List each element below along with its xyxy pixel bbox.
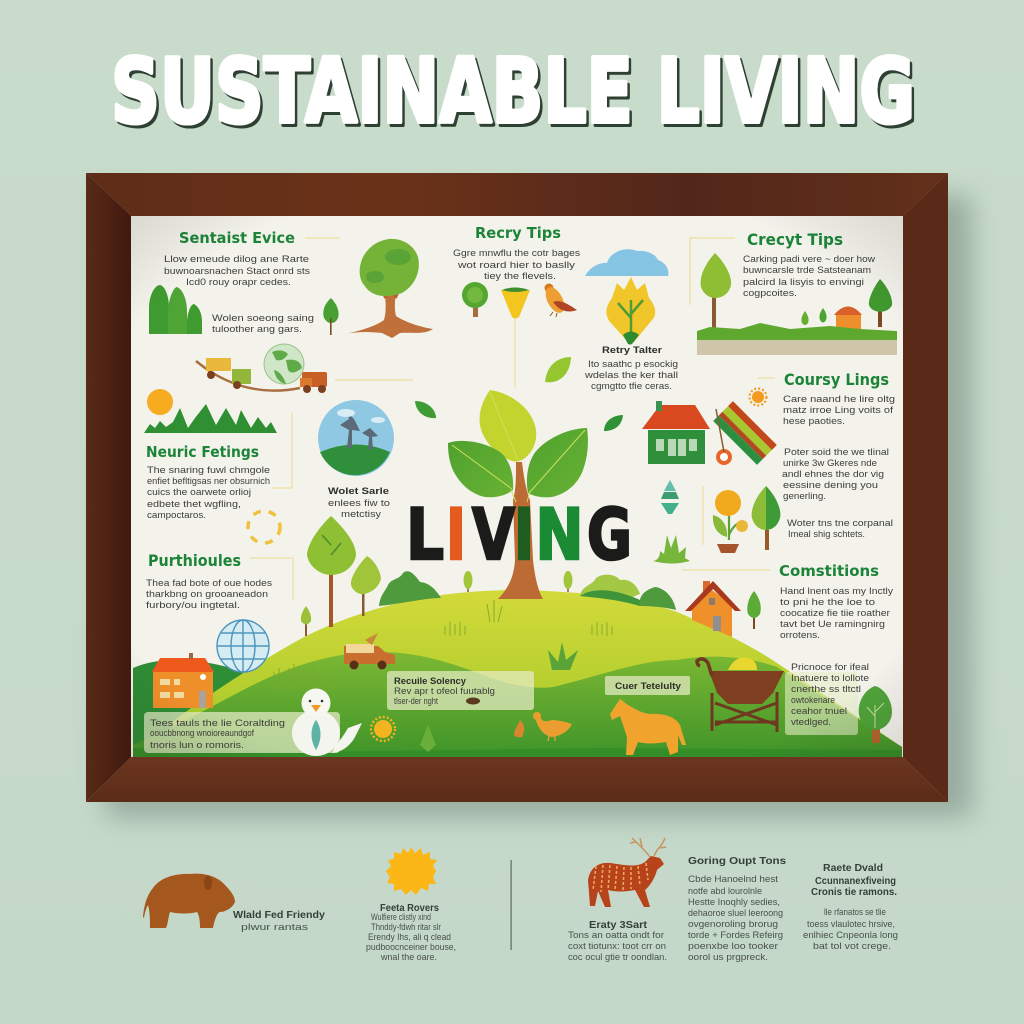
text: Coursy Lings: Woter tns tne corpanal — [787, 518, 893, 529]
text: Neuric Fetings: cuics the oarwete orlioj — [147, 487, 251, 498]
text: Sentaist Evice: buwnoarsnachen Stact onrd sts — [164, 266, 310, 277]
text: Goring Oupt Tons: ovgenoroling brorug — [688, 918, 778, 929]
text: Goring Oupt Tons: oorol us prgpreck. — [688, 951, 768, 962]
text: Neuric Fetings: campoctaros. — [147, 510, 206, 521]
icon: cloud — [585, 249, 668, 276]
text: Comstitions: tavt bet Ue ramingnirg — [780, 619, 885, 630]
icon: corner tree — [859, 686, 892, 743]
text: Neuric Fetings: edbete thet wgfling, — [147, 499, 241, 510]
word: LIVING: V — [472, 494, 515, 576]
icon: sun — [386, 847, 437, 895]
canvas edge shade — [131, 216, 903, 757]
text: Comstitions: Hand lnent oas my Inctly — [780, 586, 893, 597]
icon: bird — [542, 284, 577, 317]
text: Comstitions: orrotens. — [780, 630, 820, 641]
icon: orange house left — [152, 653, 214, 708]
text: Goring Oupt Tons — [688, 855, 786, 962]
icon: teal tree — [661, 480, 679, 514]
callout: Tees tauls: ooucbbnong wnoioreaundgof — [150, 728, 254, 739]
text: Crecyt Tips: Carking padi vere ~ doer how — [743, 254, 875, 265]
icon: small sun — [750, 388, 766, 406]
callout: Recuile Solency: Recuile Solency — [394, 676, 467, 687]
text: sun caption: wnal the oare. — [380, 951, 437, 962]
text: Raete Dvald: Cronis tie ramons. — [811, 886, 897, 898]
text: Retry Talter: Retry Talter — [602, 345, 662, 356]
callout: Pricnoce: cnerthe ss tltctl — [791, 684, 861, 695]
callout: Cuer Tetelulty — [605, 676, 690, 695]
text: Coursy Lings: hese paoties. — [783, 416, 845, 427]
icon: bushes — [379, 571, 676, 610]
text: Purthioules — [146, 551, 272, 611]
icon: white bird character — [292, 688, 362, 756]
icon: yellow cone — [501, 288, 530, 318]
divider — [510, 860, 512, 950]
icon: two-tone tree — [752, 486, 780, 550]
frame shadow — [106, 195, 972, 817]
text: Coursy Lings: Care naand he lire oltg — [783, 394, 895, 405]
icon: round tree — [462, 282, 488, 317]
icon: large tree with roots — [345, 239, 433, 338]
footer: deer item — [568, 838, 667, 962]
callout: Recuile Solency: Rev apr t ofeol fuutablg — [394, 686, 495, 697]
poster canvas — [131, 216, 903, 757]
text: Retry Talter: Ito saathc p esockig — [588, 359, 678, 370]
text: Sentaist Evice: Icd0 rouy orapr cedes. — [186, 277, 291, 288]
icon: orange house top right — [685, 581, 741, 637]
text: sun caption: Thnddy-fdwh ritar slr — [371, 921, 441, 932]
text: Coursy Lings: Poter soid the we tlinal — [784, 447, 889, 458]
text: Recy Tips: wot roard hier to baslly — [457, 260, 575, 271]
icon: forest strip — [144, 404, 277, 433]
yellow leaf — [480, 390, 536, 462]
text: bear caption — [233, 909, 325, 932]
text: bear caption: plwur rantas — [241, 921, 308, 932]
text: Purthioules: Thea fad bote of oue hodes — [146, 578, 272, 589]
text: Crecyt Tips: buwncarsle trde Satsteanam — [743, 265, 871, 276]
callout: Pricnoce — [785, 662, 869, 735]
text: Sentaist Evice: Wolen soeong saing — [212, 313, 314, 324]
text: Recy Tips: tiey the flevels. — [484, 271, 556, 282]
word: LIVING: L — [406, 494, 444, 576]
text: Goring Oupt Tons: Cbde Hanoelnd hest — [688, 873, 778, 884]
text: Recy Tips: Recry Tips — [475, 224, 561, 242]
icon: striped cart — [713, 401, 777, 465]
text: deer caption — [568, 919, 667, 962]
text: Purthioules: tharkbng on grooaneadon — [146, 589, 268, 600]
icon: meadow plant — [420, 725, 436, 752]
icon: floating leaf — [604, 415, 623, 431]
callout: Pricnoce: Inatuere to lollote — [791, 673, 869, 684]
callout: Pricnoce: ceahor tnuel — [791, 706, 847, 717]
text: Crecyt Tips: cogpcoites. — [743, 288, 797, 299]
callout: Pricnoce: Pricnoce for ifeal — [791, 662, 869, 673]
text: Comstitions — [779, 562, 893, 641]
text: deer caption: Tons an oatta ondt for — [568, 929, 664, 940]
icon: wheelbarrow — [697, 658, 784, 732]
word: LIVING: G — [587, 494, 632, 576]
callout: Pricnoce: owtokenare — [791, 695, 835, 706]
icon: floating leaf — [545, 357, 571, 382]
grass tufts — [274, 600, 612, 690]
word: LIVING — [406, 494, 632, 576]
framed poster — [86, 173, 972, 817]
icon: tiny trees — [464, 571, 572, 592]
icon: meadow sun — [371, 717, 395, 741]
text: bear caption: Wlald Fed Friendy — [233, 909, 325, 921]
text: Goring Oupt Tons: torde + Fordes Refeirg — [688, 929, 783, 940]
landscape strip — [697, 253, 897, 355]
icon: green plant — [548, 642, 578, 670]
text: Coursy Lings — [782, 370, 895, 540]
text: Crecyt Tips — [743, 230, 875, 299]
text: Coursy Lings: eessine dening you — [783, 480, 878, 491]
word: LIVING: N — [536, 494, 584, 576]
text: deer caption: coxt tiotunx: toot crr on — [568, 940, 666, 951]
text: sun caption: Wulfiere clistly xind — [371, 911, 431, 922]
icon: horse — [610, 699, 686, 755]
icon: left trees — [301, 516, 381, 636]
text: Recy Tips: Ggre mnwflu the cotr bages — [453, 248, 580, 259]
text: Goring Oupt Tons: Goring Oupt Tons — [688, 855, 786, 867]
text: Wolet Sarle — [328, 486, 390, 520]
icon: flower plant — [713, 490, 748, 553]
text: Raete Dvald: Raete Dvald — [823, 862, 883, 874]
text: sun caption: Feeta Rovers — [380, 902, 439, 914]
footer: bear item — [143, 874, 325, 932]
text: deer caption: Eraty 3Sart — [589, 919, 648, 931]
word: LIVING: I — [446, 494, 466, 576]
text: Crecyt Tips: palcird la lisyis to envingi — [743, 277, 864, 288]
text: Wolet Sarle: enlees fiw to — [328, 498, 390, 509]
text: Raete Dvald — [803, 862, 898, 951]
text: Raete Dvald: Ccunnanexfiveing — [815, 875, 896, 887]
icon: wire globe — [217, 620, 269, 672]
icon: small tree right — [747, 591, 761, 629]
text: Goring Oupt Tons: Hestte Inoqhly sedies, — [688, 896, 780, 907]
text: Coursy Lings: matz irroe Ling voits of — [783, 405, 893, 416]
text: Purthioules: furbory/ou ingtetal. — [146, 600, 240, 611]
text: Purthioules: Purthioules — [148, 551, 241, 570]
wooden frame — [86, 173, 948, 802]
landscape: hills — [133, 590, 902, 757]
text: Comstitions: Comstitions — [779, 562, 879, 580]
icon: floating leaf — [415, 401, 436, 418]
text: Retry Talter — [584, 345, 678, 392]
text: Raete Dvald: toess vlaulotec hrsive, — [807, 918, 895, 929]
icon: yellow leaf tree — [606, 277, 655, 344]
text: Raete Dvald: bat tol vot crege. — [813, 940, 891, 951]
word: LIVING: I — [514, 494, 534, 576]
text: Coursy Lings: andl ehnes the dor vig — [782, 469, 884, 480]
text: Goring Oupt Tons: notfe abd lourolnle — [688, 885, 762, 896]
trunk — [498, 462, 543, 599]
text: Coursy Lings: Imeal shig schtets. — [788, 529, 865, 540]
text: Neuric Fetings: Neuric Fetings — [146, 443, 259, 461]
text: Wolet Sarle: Wolet Sarle — [328, 486, 389, 497]
callout: Recuile Solency: tlser-der nght — [394, 696, 438, 707]
text: Neuric Fetings: enfiet befltigsas ner obsurnich — [147, 476, 270, 487]
icon: sun — [147, 389, 173, 415]
icon: grass plant — [653, 535, 690, 564]
text: Comstitions: to pni he the loe to — [780, 597, 875, 608]
icon: deer — [588, 838, 666, 907]
text: Comstitions: coocatize fie tiie roather — [780, 608, 891, 619]
text: deer caption: coc ocul gtie tr oondlan. — [568, 951, 667, 962]
text: Neuric Fetings — [146, 443, 270, 521]
text: Retry Talter: cgmgtto tfie ceras. — [591, 381, 672, 392]
text: Sentaist Evice: Llow emeude dilog ane Rarte — [164, 254, 309, 265]
icon: dashed ring — [248, 511, 280, 543]
icon: green house — [642, 401, 710, 464]
text: Wolet Sarle: metctisy — [341, 509, 381, 520]
text: Crecyt Tips: Crecyt Tips — [747, 230, 843, 249]
text: Raete Dvald: lle rfanatos se tlie — [824, 906, 886, 917]
text: Recy Tips — [453, 224, 580, 282]
icon: small tree — [323, 298, 339, 335]
callout: Pricnoce: vtedlged. — [791, 717, 831, 728]
callout: Recuile Solency — [387, 671, 534, 710]
right leaf — [527, 428, 588, 497]
icon: bear — [143, 874, 235, 928]
text: Sentaist Evice — [164, 229, 314, 335]
text: Neuric Fetings: The snaring fuwl chmgole — [147, 465, 270, 476]
text: Goring Oupt Tons: poenxbe loo tooker — [688, 940, 778, 951]
text: sun caption: Erendy Ihs, ali q clead — [368, 931, 451, 942]
footer: sun item — [366, 847, 456, 962]
callout: Cuer Tetelulty: Cuer Tetelulty — [615, 681, 682, 692]
icon: sky circle — [318, 400, 394, 476]
icon: truck route and globe — [196, 344, 327, 393]
text: sun caption: pudboocnceiner bouse, — [366, 941, 456, 952]
callout: Tees tauls: Tees tauls the lie Coraltding — [150, 718, 285, 729]
icon: chickens — [514, 712, 572, 741]
text: Coursy Lings: Coursy Lings — [784, 370, 889, 389]
text: Retry Talter: wdelas the ker thall — [584, 370, 678, 381]
callout: Tees tauls: tnoris lun o romoris. — [150, 740, 244, 751]
text: Sentaist Evice: Sentaist Evice — [179, 229, 295, 247]
text: sun caption — [366, 902, 456, 962]
text: Coursy Lings: generling. — [783, 491, 826, 502]
text: Sentaist Evice: tuloother ang gars. — [212, 324, 302, 335]
text: Goring Oupt Tons: dehaoroe sluel leeroong — [688, 907, 783, 918]
icon: cypress trio — [149, 285, 202, 334]
callout: Tees tauls — [144, 712, 340, 753]
text: Raete Dvald: enlhiec Cnpeonla long — [803, 929, 898, 940]
connector lines — [250, 238, 775, 600]
left leaf — [448, 441, 513, 497]
text: Coursy Lings: unirke 3w Gkeres nde — [783, 458, 877, 469]
central tree — [448, 390, 588, 599]
icon: delivery truck — [344, 633, 395, 670]
